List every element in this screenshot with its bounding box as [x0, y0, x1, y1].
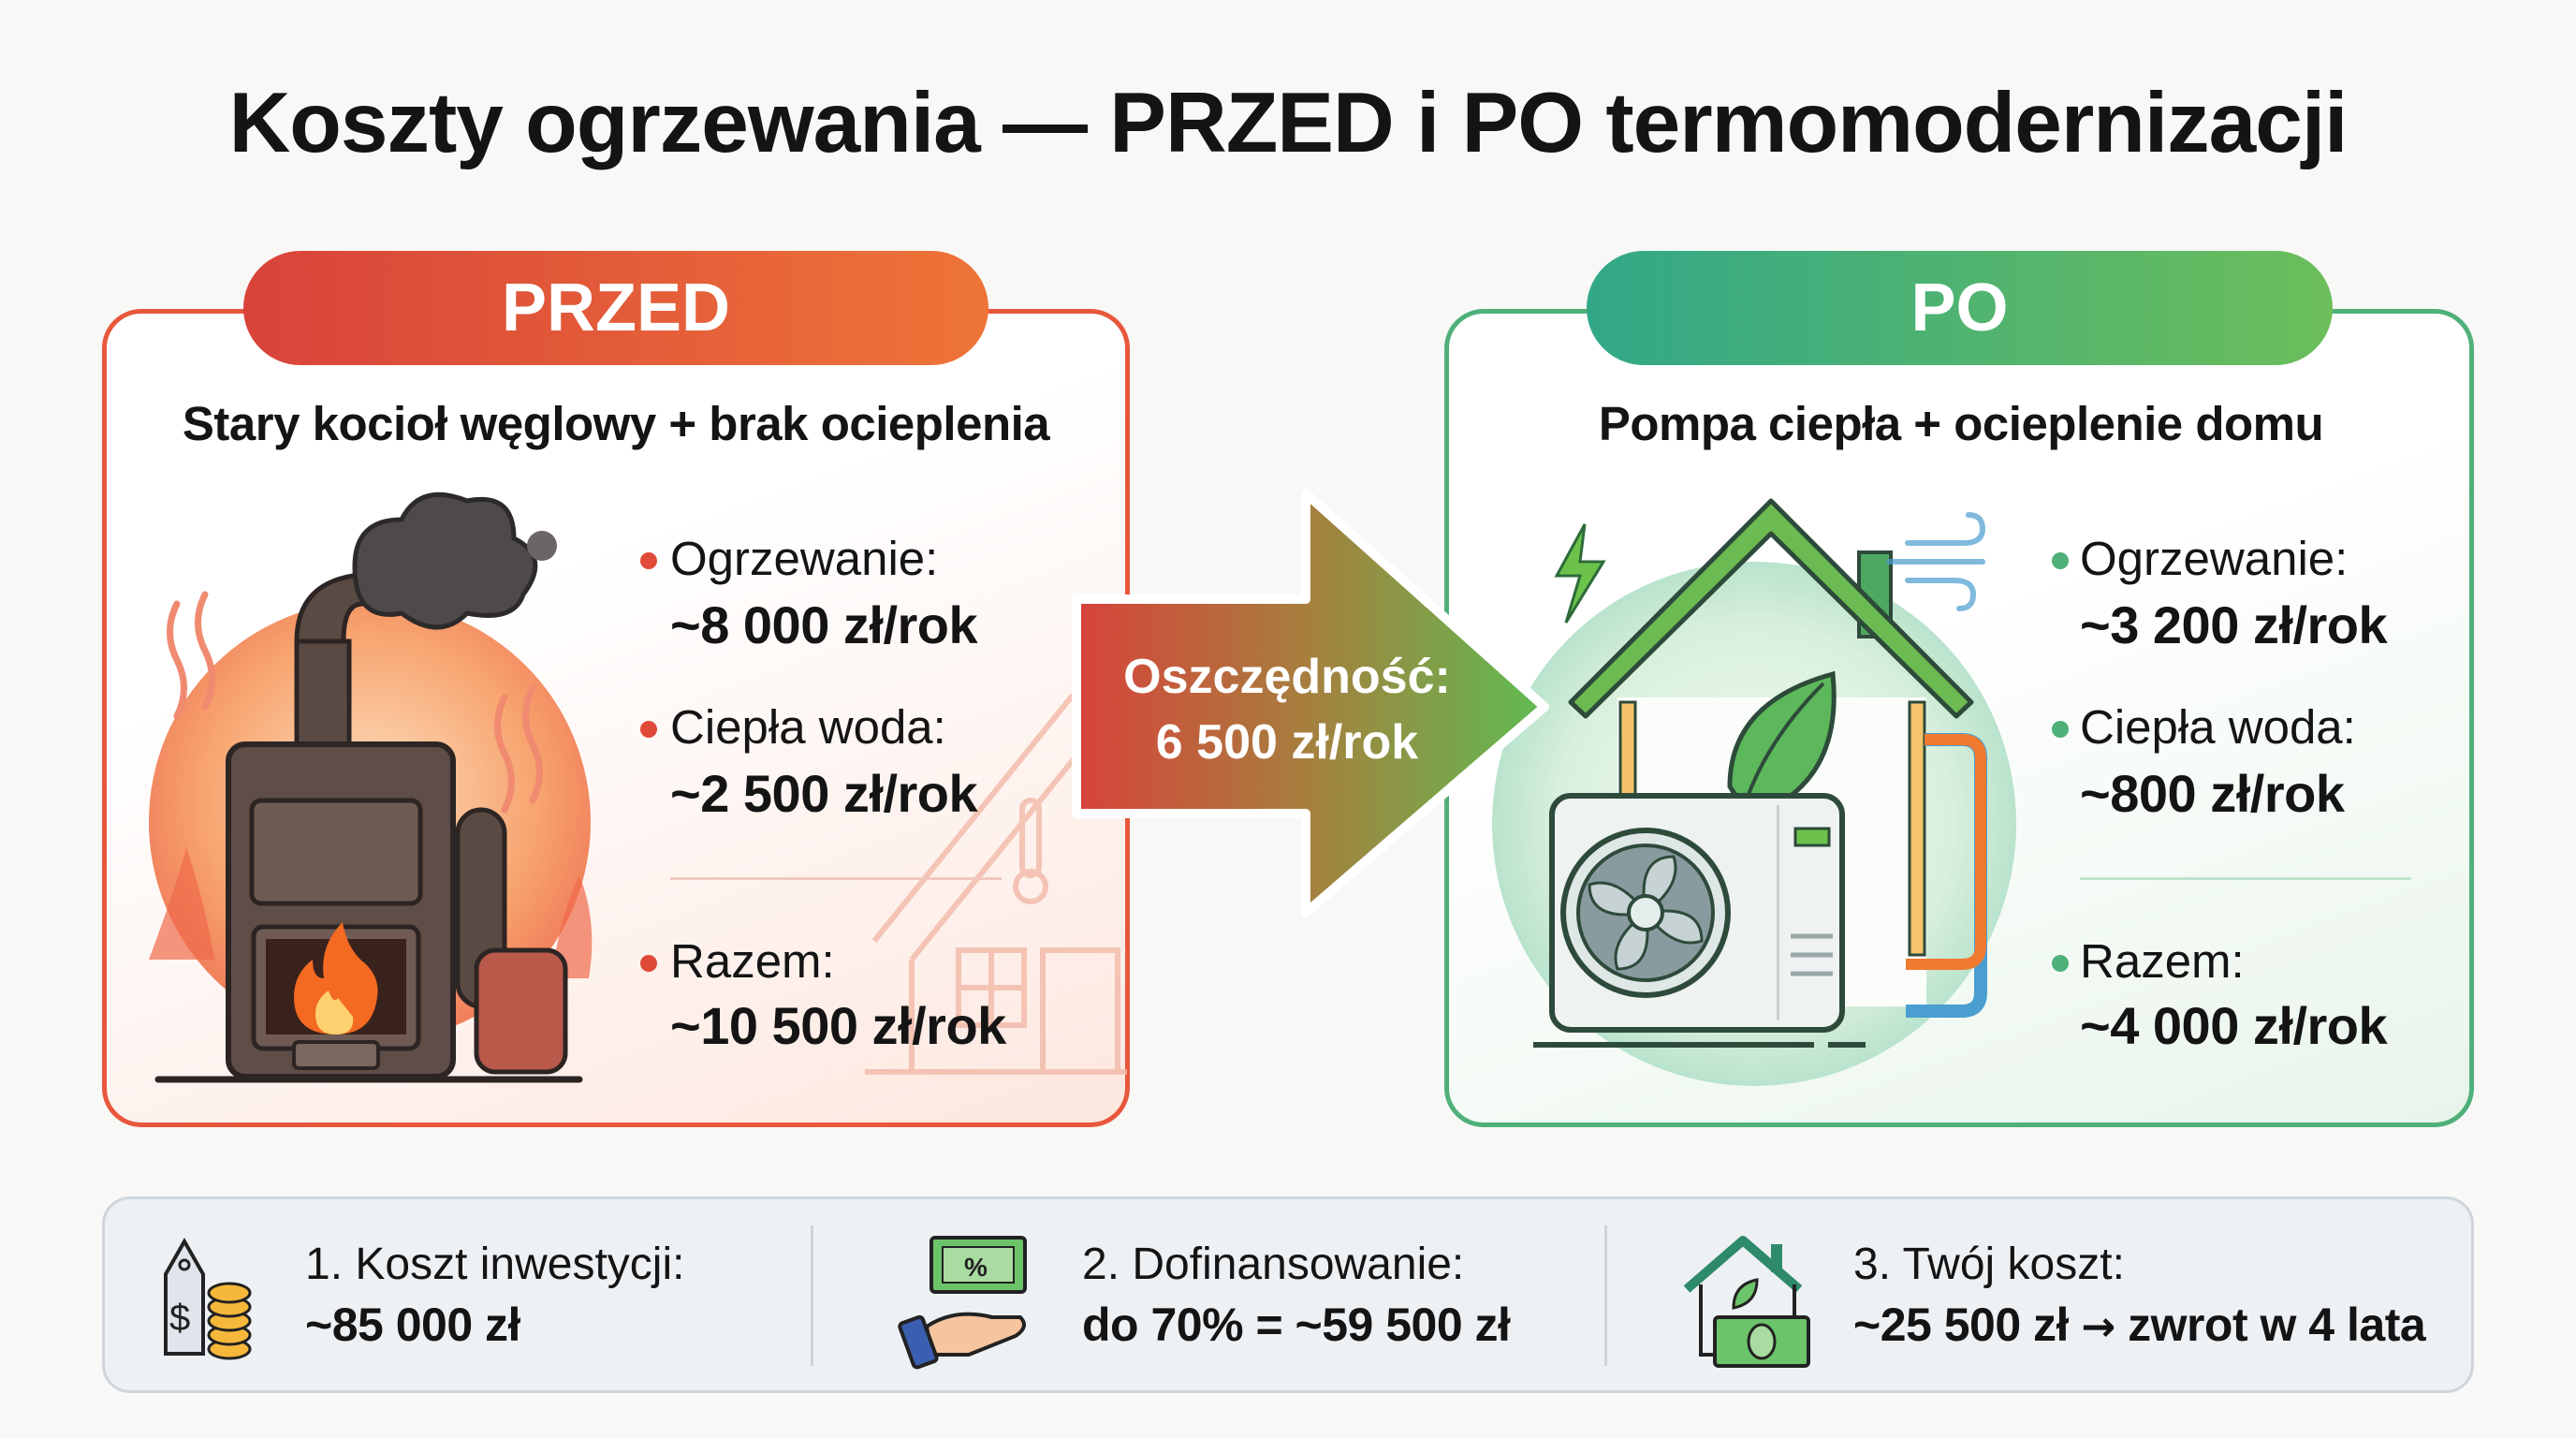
bullets: po costs: ~3 200 zł/rok: [2080, 595, 2387, 654]
item 3: ~25 500 zł → zwrot w 4 lata: [1853, 1299, 2425, 1351]
bullets: przed costs: ~2 500 zł/rok: [670, 764, 977, 823]
title: Koszty ogrzewania — PRZED i PO termomodernizacji: [229, 76, 2347, 170]
tab: PRZED: [243, 251, 988, 365]
tab: PRZED: PRZED: [502, 271, 730, 345]
tab: PO: [1587, 251, 2333, 365]
item 2: do 70% = ~59 500 zł: [1082, 1299, 1510, 1351]
savings text: [1123, 650, 1451, 770]
bullets: przed costs: ~10 500 zł/rok: [670, 996, 1006, 1055]
icon: money on hand: %: [964, 1253, 988, 1282]
bullets: przed costs: Ciepła woda:: [670, 700, 946, 754]
boiler illustration: [149, 492, 592, 1082]
bullets: po costs: Ciepła woda:: [2080, 700, 2356, 754]
panel: przed: [102, 309, 1130, 1127]
bottom bar: [102, 1196, 2474, 1393]
subtitle: przed: Stary kocioł węglowy + brak ocieplenia: [183, 397, 1049, 450]
item 3: 3. Twój koszt:: [1853, 1240, 2125, 1289]
item 2: 2. Dofinansowanie:: [1082, 1240, 1464, 1289]
item 1: 1. Koszt inwestycji:: [305, 1240, 684, 1289]
item 2: [1082, 1240, 1511, 1351]
bullets: przed costs: ~8 000 zł/rok: [670, 595, 977, 654]
tab: PO: PO: [1910, 271, 2009, 345]
bullets: przed costs: Ogrzewanie:: [670, 532, 938, 585]
item 1: ~85 000 zł: [305, 1299, 520, 1351]
subtitle: po: Pompa ciepła + ocieplenie domu: [1599, 397, 2323, 450]
item 3: [1853, 1240, 2426, 1351]
icon: house with money: [1683, 1236, 1810, 1368]
heat pump illustration: [1492, 498, 2016, 1086]
bullets: po costs: ~800 zł/rok: [2080, 764, 2344, 823]
faint house outline: [865, 693, 1127, 1075]
panel: po: [1444, 309, 2474, 1127]
icon: price tag with coins: [164, 1238, 251, 1359]
bullets: po costs: Ogrzewanie:: [2080, 532, 2348, 585]
bullets: po costs: Razem:: [2080, 934, 2245, 988]
savings text: 6 500 zł/rok: [1156, 715, 1418, 770]
bullets: przed costs: Razem:: [670, 934, 835, 988]
savings text: Oszczędność:: [1123, 650, 1451, 704]
icon: money on hand: [898, 1236, 1027, 1369]
arrow: savings: [1072, 504, 1549, 902]
icon: price tag with coins: $: [169, 1298, 190, 1339]
item 1: [305, 1240, 684, 1351]
bullets: po costs: [2052, 532, 2411, 1055]
bullets: po costs: ~4 000 zł/rok: [2080, 996, 2387, 1055]
bullets: przed costs: [640, 532, 1007, 1055]
